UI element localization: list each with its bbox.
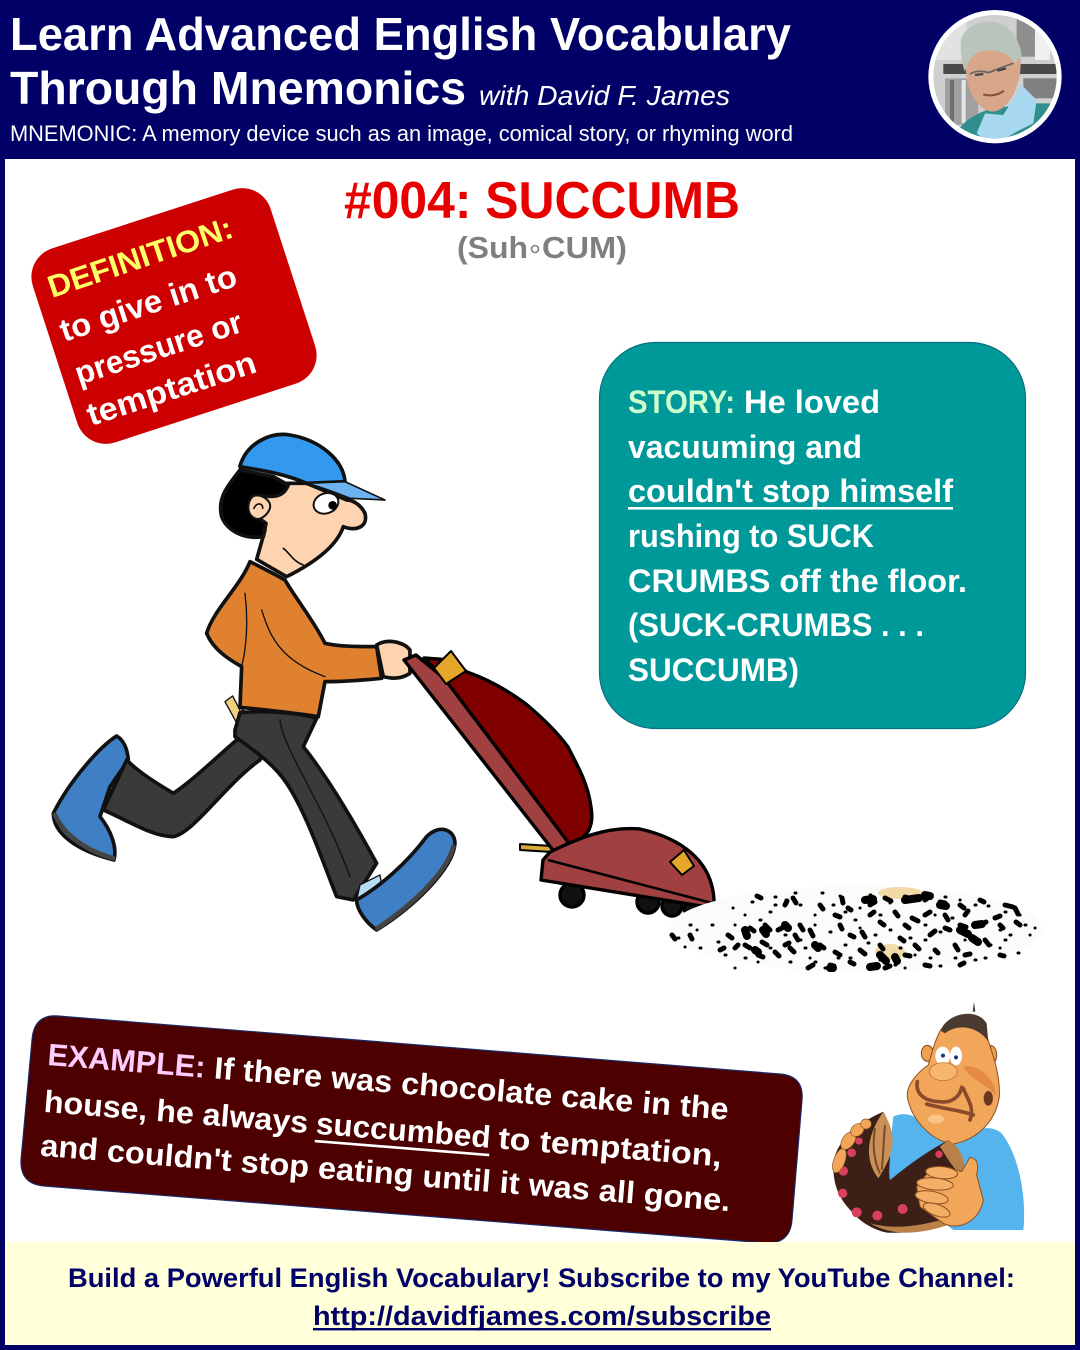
ear <box>248 496 270 519</box>
definition text: to give in to <box>55 258 241 349</box>
panel: example <box>21 1016 802 1243</box>
sock <box>357 875 382 900</box>
panel: definition <box>24 180 324 452</box>
example text: house, he always <box>43 1084 310 1140</box>
presenter credit: with David F. James <box>479 80 730 111</box>
crumbs on the floor <box>670 886 1042 972</box>
example text <box>39 1037 739 1218</box>
head <box>541 829 714 908</box>
footer banner <box>5 1242 1075 1345</box>
neck and face <box>248 483 366 577</box>
pronunciation: (Suh <box>457 230 528 265</box>
story text: vacuuming and <box>628 429 862 465</box>
story text: STORY: <box>628 384 735 420</box>
hand <box>377 641 410 678</box>
ears <box>921 1045 933 1061</box>
hand fingers <box>914 1165 958 1220</box>
example text: EXAMPLE: <box>46 1037 207 1085</box>
hair <box>221 470 288 537</box>
bag <box>424 658 592 848</box>
pronunciation <box>457 230 627 265</box>
story text: CRUMBS off the floor. <box>628 563 967 599</box>
example text: and couldn't stop eating until it was all gone. <box>39 1128 732 1218</box>
story text <box>628 384 967 688</box>
call to action: Build a Powerful English Vocabulary! Subscribe to my YouTube Channel: <box>68 1263 1015 1293</box>
sweater <box>207 562 382 717</box>
story text: He loved <box>744 384 880 420</box>
example text: to temptation, <box>497 1121 723 1173</box>
handle <box>404 655 571 854</box>
story text: rushing to SUCK <box>628 518 874 554</box>
vacuum cleaner <box>404 651 714 916</box>
back shoe <box>53 736 128 860</box>
hair <box>941 1002 988 1042</box>
illustration: man eating chocolate cake <box>830 1002 1024 1233</box>
subscribe link: http://davidfjames.com/subscribe <box>313 1301 771 1331</box>
example text: succumbed <box>315 1106 492 1155</box>
front leg <box>235 712 377 900</box>
cheek highlight <box>963 1066 997 1097</box>
pronunciation: CUM) <box>542 230 627 265</box>
example text: If there was chocolate cake in the <box>213 1050 730 1127</box>
eyes <box>935 1047 950 1065</box>
definition text: temptation <box>82 344 261 433</box>
illustration: man running with vacuum <box>53 434 455 930</box>
mnemonic definition: MNEMONIC: A memory device such as an image, comical story, or rhyming word <box>10 121 793 146</box>
chocolate smear <box>917 1082 973 1120</box>
story text: couldn't stop himself <box>628 473 953 509</box>
header banner <box>0 0 1080 158</box>
cap <box>240 434 345 483</box>
definition text <box>55 258 261 433</box>
head tag <box>670 850 694 875</box>
eye <box>311 490 341 517</box>
story text: SUCCUMB) <box>628 652 799 688</box>
cord pipe <box>520 844 552 852</box>
story text: (SUCK-CRUMBS . . . <box>628 607 924 643</box>
definition text: pressure or <box>70 304 247 392</box>
cake <box>833 1112 959 1233</box>
front shoe <box>357 829 455 930</box>
back leg <box>103 737 273 837</box>
definition label: DEFINITION: <box>43 210 237 305</box>
heading: word: #004: SUCCUMB <box>344 172 740 230</box>
nose <box>929 1063 957 1081</box>
tool in pocket <box>225 696 247 726</box>
right hand <box>917 1157 983 1226</box>
icon: presenter portrait <box>927 10 1067 147</box>
head <box>907 1021 999 1144</box>
tag <box>434 651 466 684</box>
title line 2: Through Mnemonics <box>10 62 466 114</box>
panel: story <box>600 342 1026 728</box>
title: Learn Advanced English Vocabulary <box>10 8 791 60</box>
left fingers <box>830 1119 871 1174</box>
icing dots <box>838 1137 943 1221</box>
wheels <box>560 883 584 907</box>
shirt <box>887 1114 1024 1230</box>
